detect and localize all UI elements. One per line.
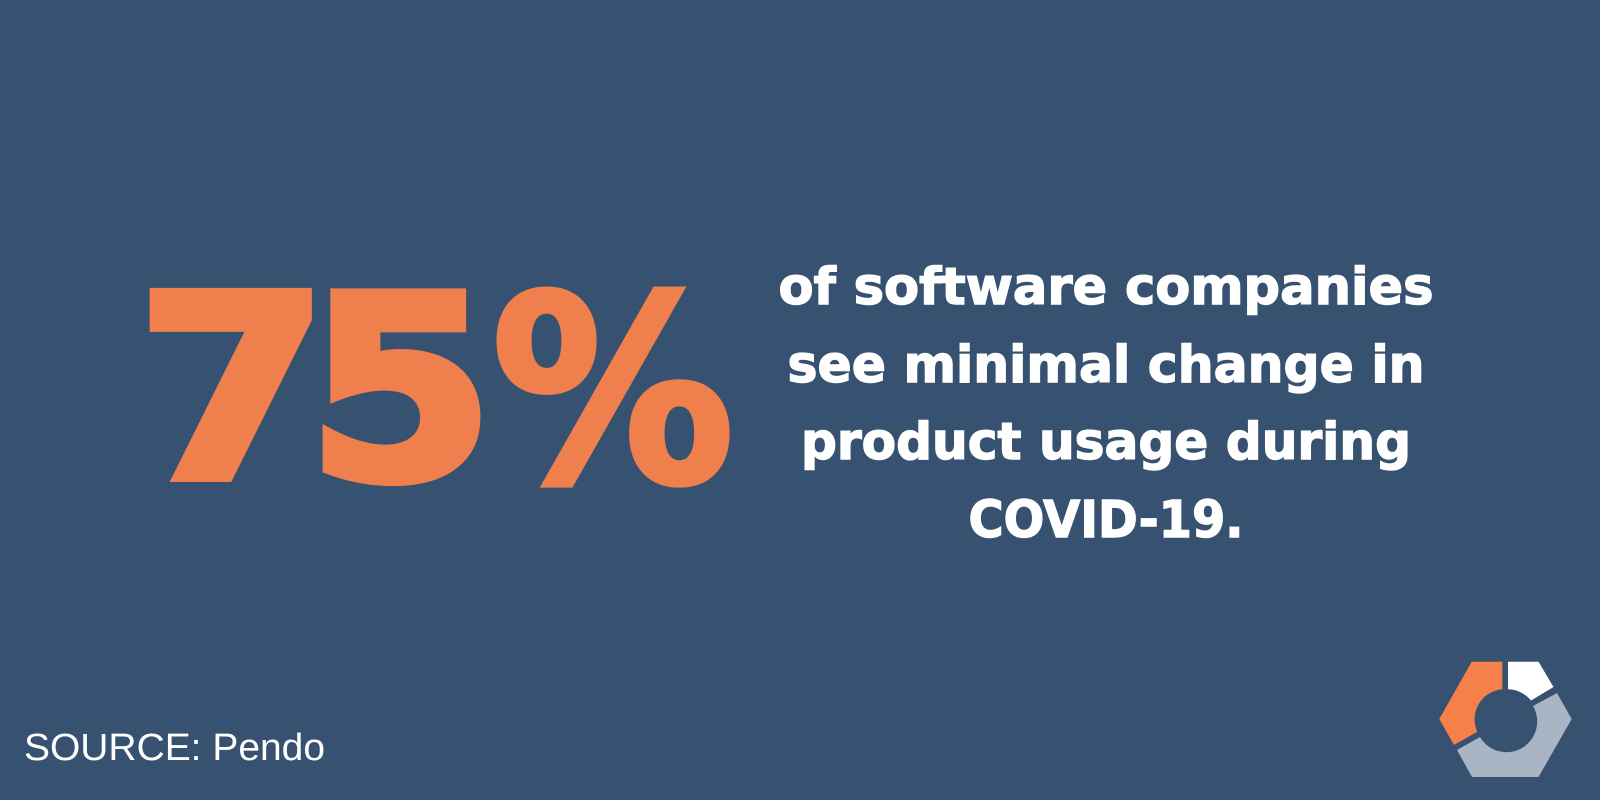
big statistic: 75% (136, 242, 734, 542)
statement text (778, 258, 1434, 550)
big statistic: 75%: 7 (136, 242, 329, 538)
statement text: COVID-19. (968, 491, 1244, 550)
statement text: see minimal change in (788, 336, 1424, 395)
icon: hexagon logo (1439, 662, 1572, 777)
big statistic: 75%: % (492, 242, 734, 542)
statement text: product usage during (801, 413, 1411, 472)
statement text: of software companies (778, 258, 1434, 317)
big statistic: 75%: 5 (306, 242, 494, 538)
source note: SOURCE: Pendo (24, 727, 325, 769)
